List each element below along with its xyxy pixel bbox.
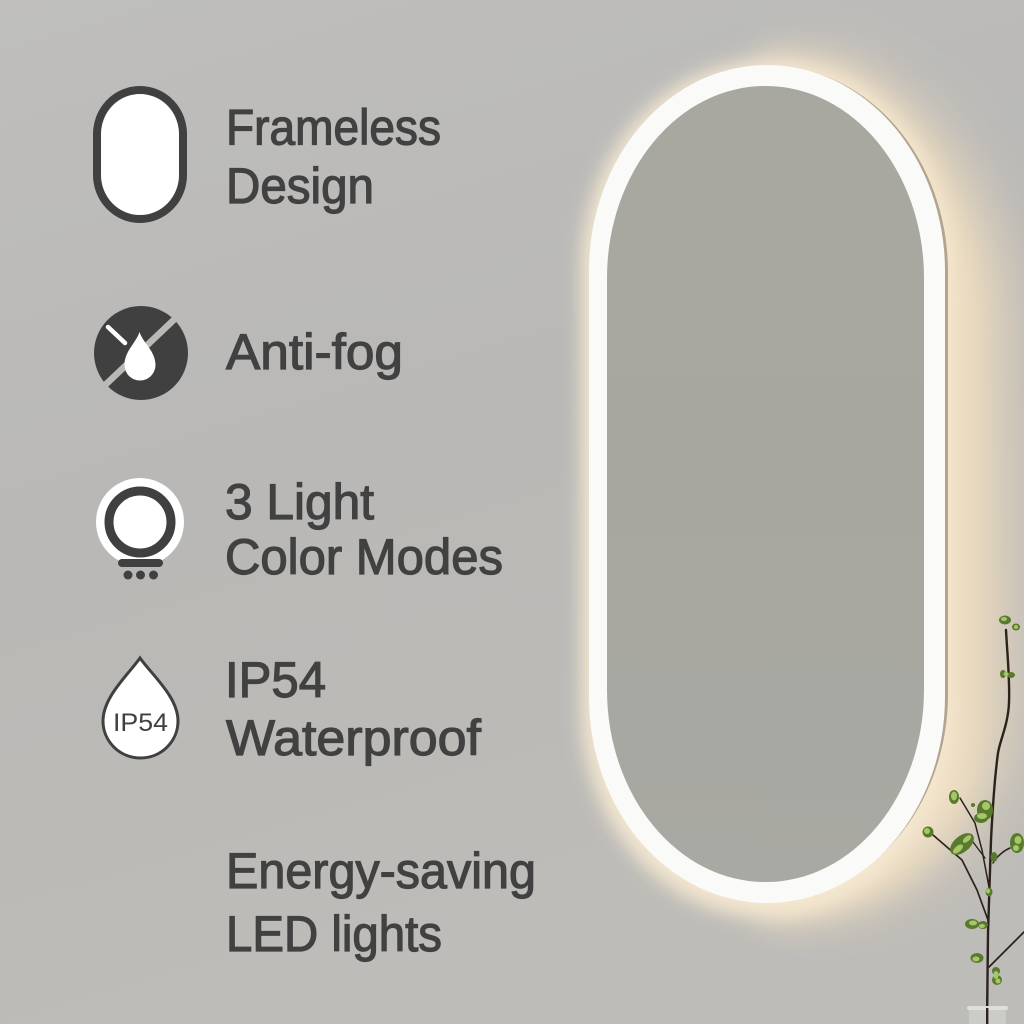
feature: energy-saving LED lights: Energy-saving xyxy=(226,843,536,899)
mirror glass xyxy=(607,86,924,882)
icon: anti-fog drop xyxy=(94,306,188,400)
mirror side edge xyxy=(592,66,948,900)
label: IP54 waterproof xyxy=(225,652,481,766)
icon: IP54 drop xyxy=(103,658,178,758)
plant leaves xyxy=(922,616,1024,985)
vase xyxy=(967,1006,1008,1024)
mirror with backlight glow xyxy=(581,50,1006,925)
label: light color modes xyxy=(225,474,503,585)
feature: light color modes xyxy=(96,474,503,585)
label: light color modes: 3 Light xyxy=(225,474,374,530)
feature: energy-saving LED lights: LED lights xyxy=(226,906,442,962)
plant stems xyxy=(933,630,1024,1024)
plant xyxy=(922,616,1024,1024)
label: frameless design: Design xyxy=(226,158,374,214)
feature: frameless design xyxy=(97,90,441,219)
label: frameless design: Frameless xyxy=(226,100,441,156)
label: IP54 waterproof: Waterproof xyxy=(226,710,481,766)
feature: IP54 waterproof xyxy=(103,652,481,766)
feature: anti-fog xyxy=(94,306,403,400)
icon: IP54 drop: IP54 xyxy=(113,709,168,737)
icon: frameless pill xyxy=(97,90,183,219)
mirror white frame xyxy=(589,65,945,903)
label: light color modes: Color Modes xyxy=(225,529,503,585)
warm backlight glow xyxy=(581,50,1006,925)
feature: energy-saving LED lights xyxy=(226,843,536,962)
icon: light modes xyxy=(96,478,184,580)
label: IP54 waterproof: IP54 xyxy=(225,652,326,708)
label: frameless design xyxy=(226,100,441,214)
label: anti-fog: Anti-fog xyxy=(226,324,403,380)
